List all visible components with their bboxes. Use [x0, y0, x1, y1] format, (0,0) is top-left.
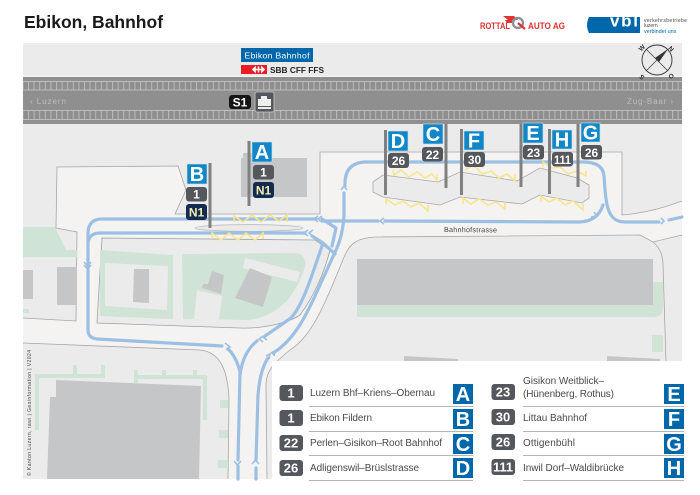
stop flag F: F: [468, 130, 480, 152]
legend row: line 26 to D: Adligenswil–Brüslstrasse: [310, 463, 419, 474]
stop flag E: E: [526, 123, 540, 145]
legend row: line 26 to G: 26: [496, 434, 510, 450]
logo: vbl: verkehrsbetriebe: [644, 18, 687, 24]
direction label: Luzern: ‹ Luzern: [30, 97, 66, 106]
SBB logo: [241, 65, 325, 75]
stop flag D: D: [391, 131, 405, 153]
legend row: line 26 to D: D: [456, 458, 470, 480]
bus routes: [84, 162, 682, 479]
station sign: [241, 48, 313, 62]
compass: N: [667, 45, 675, 54]
legend row: line 23 to E: 23: [496, 384, 510, 400]
legend row: line 1 to B: 1: [287, 410, 295, 426]
SBB logo: SBB CFF FFS: [270, 66, 325, 75]
legend row: line 30 to F: [492, 409, 684, 432]
legend row: line 26 to G: [492, 434, 684, 456]
boarding zigzags: [212, 162, 586, 240]
stop flag D: 26: [392, 154, 405, 168]
stop flag F: [460, 129, 485, 195]
legend row: line 1 to B: [280, 409, 473, 432]
stop flag H: [548, 129, 573, 194]
stop flag B: 1: [193, 188, 200, 202]
stop flag C: C: [426, 124, 440, 146]
legend row: line 1 to B: B: [456, 409, 470, 431]
legend row: line 22 to C: C: [456, 434, 470, 456]
legend row: line 22 to C: Perlen–Gisikon–Root Bahnhof: [310, 438, 442, 449]
stop flag A: N1: [256, 184, 271, 198]
legend row: line 1 to A: 1: [287, 386, 295, 400]
legend row: line 23 to E: [492, 376, 684, 407]
compass: W: [638, 43, 648, 53]
legend row: line 23 to E: E: [667, 384, 681, 406]
stop flag C: 22: [426, 148, 439, 162]
street label: Bahnhofstrasse: Bahnhofstrasse: [444, 225, 497, 234]
S1 badge: [229, 95, 251, 110]
legend row: line 30 to F: 30: [496, 410, 510, 424]
title: Ebikon, Bahnhof: [24, 12, 163, 32]
stop flag B: B: [190, 164, 204, 186]
compass: O: [666, 71, 675, 80]
stop flag A: [248, 141, 274, 206]
legend row: line 23 to E: Gisikon Weitblick–: [523, 376, 604, 387]
stop flag B: N1: [189, 206, 204, 220]
legend row: line 111 to H: [492, 458, 684, 481]
logo: vbl: [587, 12, 687, 35]
S1 badge: S1: [233, 96, 248, 110]
legend row: line 1 to A: A: [456, 384, 470, 406]
stop flag E: 23: [527, 146, 540, 160]
stop flag G: 26: [585, 146, 598, 160]
legend row: line 30 to F: F: [668, 409, 680, 431]
road island: [195, 225, 303, 231]
legend row: line 26 to G: Ottigenbühl: [523, 438, 575, 449]
stop flag A: A: [255, 142, 269, 164]
stop flag C: [422, 124, 448, 188]
logo: Rottal Auto AG: [480, 16, 565, 32]
stop flag D: [384, 130, 409, 195]
legend row: line 1 to A: Luzern Bhf–Kriens–Obernau: [310, 388, 435, 399]
legend row: line 26 to D: [280, 458, 473, 481]
legend row: line 26 to D: 26: [284, 460, 298, 476]
legend row: line 22 to C: [280, 434, 473, 456]
legend row: line 111 to H: 111: [493, 460, 513, 474]
station sign: Ebikon Bahnhof: [244, 50, 310, 60]
railway: [23, 76, 682, 124]
legend row: line 26 to G: G: [666, 434, 682, 456]
legend row: line 1 to B: Ebikon Fildern: [310, 413, 372, 424]
logo: vbl: verbindet uns: [644, 29, 677, 35]
platform island: [373, 168, 589, 205]
icon: train: [255, 92, 274, 112]
stop flag G: [576, 122, 602, 187]
stop flag G: G: [583, 122, 598, 144]
green areas and buildings: [23, 153, 666, 479]
logo: vbl: luzern: [644, 23, 658, 29]
direction label: Zug-Baar: Zug-Baar ›: [627, 97, 673, 106]
stop flag E: [520, 123, 544, 187]
copyright: © Kanton Luzern, rawi | Geoinformation | V2024: [26, 350, 33, 476]
compass: [638, 43, 675, 81]
legend row: line 30 to F: Littau Bahnhof: [523, 413, 587, 424]
legend row: line 23 to E: (Hünenberg, Rothus): [523, 389, 614, 400]
stop flag F: 30: [468, 153, 481, 167]
legend row: line 111 to H: Inwil Dorf–Waldibrücke: [523, 463, 624, 474]
panel: legend: [272, 361, 700, 495]
legend row: line 1 to A: [280, 384, 473, 407]
logo: Rottal Auto AG: AUTO AG: [528, 21, 565, 32]
stop flag H: 111: [554, 153, 571, 167]
stop flag H: H: [555, 130, 569, 152]
road network: [23, 152, 682, 479]
compass: S: [638, 72, 646, 81]
logo: Rottal Auto AG: ROTTAL: [480, 21, 510, 32]
stop flag A: 1: [260, 166, 267, 180]
stop flag B: [186, 163, 212, 228]
legend row: line 22 to C: 22: [284, 436, 298, 450]
legend row: line 111 to H: H: [667, 458, 681, 480]
logo: vbl: vbl: [610, 12, 638, 30]
